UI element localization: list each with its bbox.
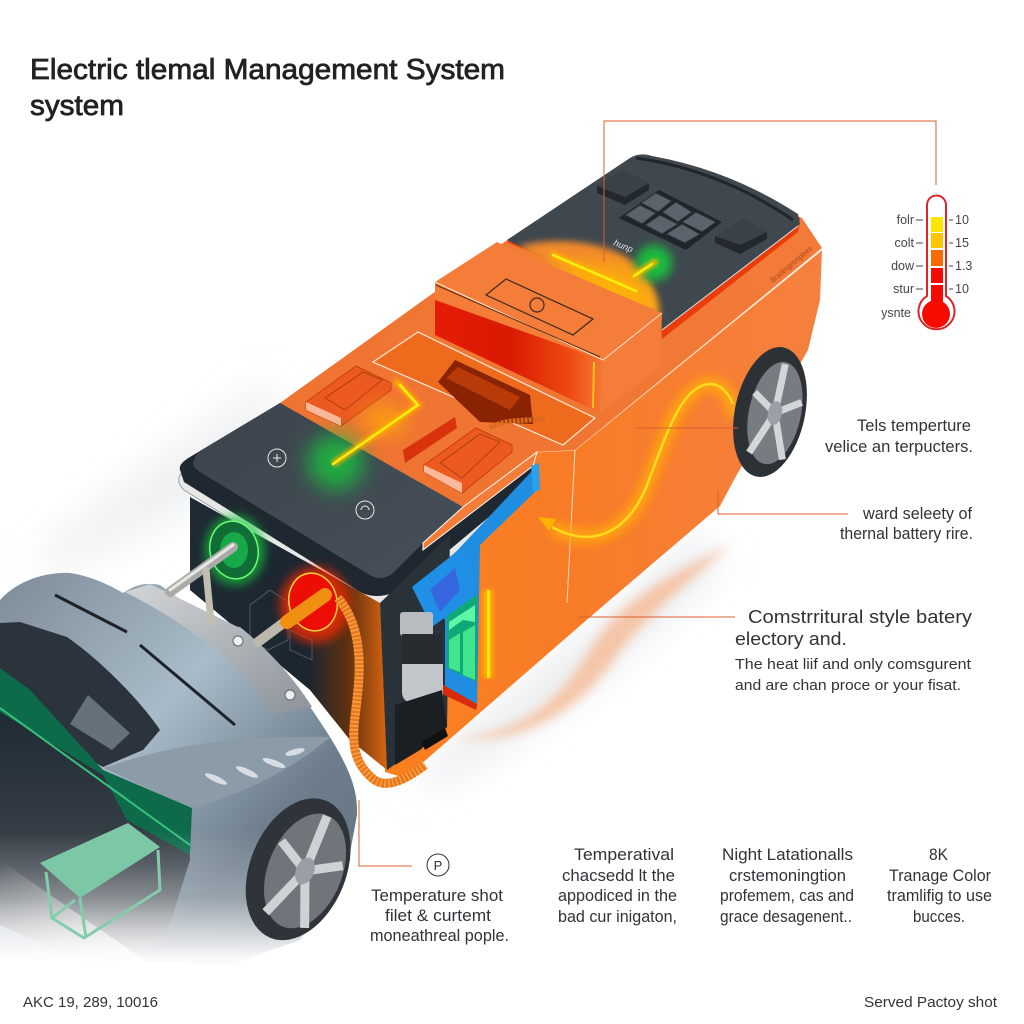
orange connector bbox=[258, 595, 325, 642]
icon: circled P bbox=[427, 854, 449, 876]
text block: temperatival: chacsedd lt the bbox=[562, 867, 675, 885]
text block: night latationalls: crstemoningtion bbox=[729, 867, 846, 885]
footer left: AKC 19, 289, 10016 bbox=[23, 994, 158, 1011]
orange braided cable bbox=[490, 418, 545, 428]
legend labels: stur bbox=[893, 282, 914, 296]
footer right: Served Pactoy shot bbox=[864, 994, 998, 1011]
deck label: hunp bbox=[612, 238, 635, 254]
text block: 8K: tramlifig to use bbox=[887, 887, 992, 905]
callout: structural style: The heat liif and only comsgurent bbox=[735, 656, 972, 673]
deck bolts bbox=[233, 636, 295, 700]
green status glow bbox=[636, 245, 672, 281]
legend labels: dow bbox=[891, 259, 915, 273]
orange ribbed hose bbox=[338, 598, 425, 783]
legend labels: folr bbox=[897, 213, 914, 227]
callout: temperature: velice an terpucters. bbox=[825, 438, 973, 456]
panel: orange side body bbox=[380, 250, 822, 778]
highlight fin bbox=[103, 737, 330, 808]
blue coolant cylinder bbox=[412, 553, 474, 627]
bottom fade bbox=[0, 830, 360, 980]
text block: 8K: 8K bbox=[929, 846, 948, 864]
text block: night latationalls: grace desagenent.. bbox=[720, 908, 852, 926]
text block: night latationalls: profemem, cas and bbox=[720, 887, 854, 905]
orange buttons bbox=[306, 366, 512, 493]
lower interior bbox=[0, 708, 190, 970]
callout: structural style: Comstrritural style batery bbox=[748, 606, 973, 627]
soft ground shadows bbox=[30, 380, 720, 790]
title bbox=[30, 54, 505, 122]
yellow vertical heat line bbox=[483, 590, 493, 678]
callout: temperature bbox=[825, 417, 973, 456]
panel: right face components bbox=[380, 463, 540, 770]
schematic line art bbox=[250, 590, 312, 660]
icon: circled P: P bbox=[434, 858, 442, 873]
legend ticks bbox=[916, 220, 953, 289]
text block: temperatival bbox=[558, 846, 677, 926]
legend values: 1.3 bbox=[955, 259, 972, 273]
panel: orange module box bbox=[435, 242, 662, 413]
car bbox=[0, 573, 370, 985]
panel: lid base and silver rim bbox=[179, 403, 538, 606]
silver connector bbox=[170, 545, 233, 622]
car body bbox=[0, 573, 357, 965]
legend labels: colt bbox=[895, 236, 915, 250]
green port bbox=[204, 515, 265, 585]
green translucent panel bbox=[0, 668, 192, 855]
side lettering: Bradesgmmplees bbox=[769, 244, 814, 285]
green cooling cells bbox=[447, 595, 477, 682]
orange heat wisp bbox=[455, 545, 730, 739]
recessed tray bbox=[373, 332, 595, 445]
legend labels bbox=[881, 213, 915, 320]
text block: temperatival: bad cur inigaton, bbox=[558, 908, 677, 926]
right wheel bbox=[722, 340, 818, 484]
module display outline bbox=[486, 279, 593, 335]
blue coolant channel bbox=[420, 470, 539, 708]
text block: temperature shot: moneathreal pople. bbox=[370, 927, 509, 945]
text block: night latationalls bbox=[720, 846, 854, 926]
legend labels: ysnte bbox=[881, 306, 911, 320]
heat swirl arrow bbox=[538, 384, 735, 537]
amber heat glow bbox=[518, 241, 660, 316]
text block: temperature shot: Temperature shot bbox=[371, 887, 503, 905]
car lights bbox=[204, 747, 305, 787]
green glow bbox=[308, 434, 364, 490]
legend values: 10 bbox=[955, 282, 969, 296]
deck button left bbox=[597, 170, 649, 205]
callout: thermal battery: ward seleety of bbox=[862, 505, 972, 523]
orange top surface bbox=[280, 155, 822, 507]
car window bbox=[0, 622, 160, 767]
text block: temperature shot: filet & curtemt bbox=[385, 907, 491, 925]
text block: 8K: bucces. bbox=[913, 908, 965, 926]
text block: night latationalls: Night Latationalls bbox=[722, 846, 853, 864]
text block: temperatival: Temperatival bbox=[574, 846, 674, 864]
text block: 8K: Tranage Color bbox=[889, 867, 991, 885]
callout: structural style bbox=[735, 606, 973, 694]
callout: temperature: Tels temperture bbox=[857, 417, 971, 435]
title: Electric tlemal Management System bbox=[30, 54, 505, 86]
callout: thermal battery: thernal battery rire. bbox=[840, 525, 973, 543]
keypad bbox=[619, 190, 722, 250]
left fade bbox=[0, 860, 180, 985]
silver rear deck bbox=[125, 584, 312, 715]
thermometer bbox=[918, 196, 954, 329]
panel: dark left face bbox=[190, 497, 387, 770]
lower electronics bbox=[395, 690, 447, 765]
text block: temperature shot bbox=[370, 887, 509, 945]
lid icon left bbox=[268, 449, 286, 467]
green bench frame bbox=[40, 823, 160, 938]
silver module bbox=[400, 612, 443, 703]
legend values: 15 bbox=[955, 236, 969, 250]
panel: dark lid top bbox=[193, 380, 537, 578]
green edge line bbox=[0, 708, 190, 845]
body vents bbox=[55, 595, 235, 725]
yellow heat lines bbox=[553, 255, 655, 291]
callout: structural style: and are chan proce or your fisat. bbox=[735, 677, 961, 694]
text block: 8K bbox=[887, 846, 992, 926]
callout: thermal battery bbox=[840, 505, 973, 543]
connector pipes bbox=[170, 545, 425, 783]
callout: structural style: electory and. bbox=[735, 628, 847, 649]
deck button right bbox=[715, 218, 767, 254]
yellow coolant line bbox=[333, 380, 418, 464]
lid icon right bbox=[356, 501, 374, 519]
title: system bbox=[30, 90, 124, 122]
red port bbox=[280, 567, 350, 643]
text block: temperatival: appodiced in the bbox=[558, 887, 677, 905]
legend values bbox=[955, 213, 972, 296]
thermometer legend bbox=[881, 196, 972, 329]
window seat shapes bbox=[70, 695, 130, 750]
side panel seam bbox=[537, 250, 822, 603]
legend values: 10 bbox=[955, 213, 969, 227]
car wheel bbox=[226, 783, 370, 956]
red base strip bbox=[438, 683, 477, 710]
leader lines bbox=[359, 121, 936, 866]
main battery unit bbox=[179, 154, 822, 778]
panel: dark top control deck bbox=[507, 154, 800, 339]
